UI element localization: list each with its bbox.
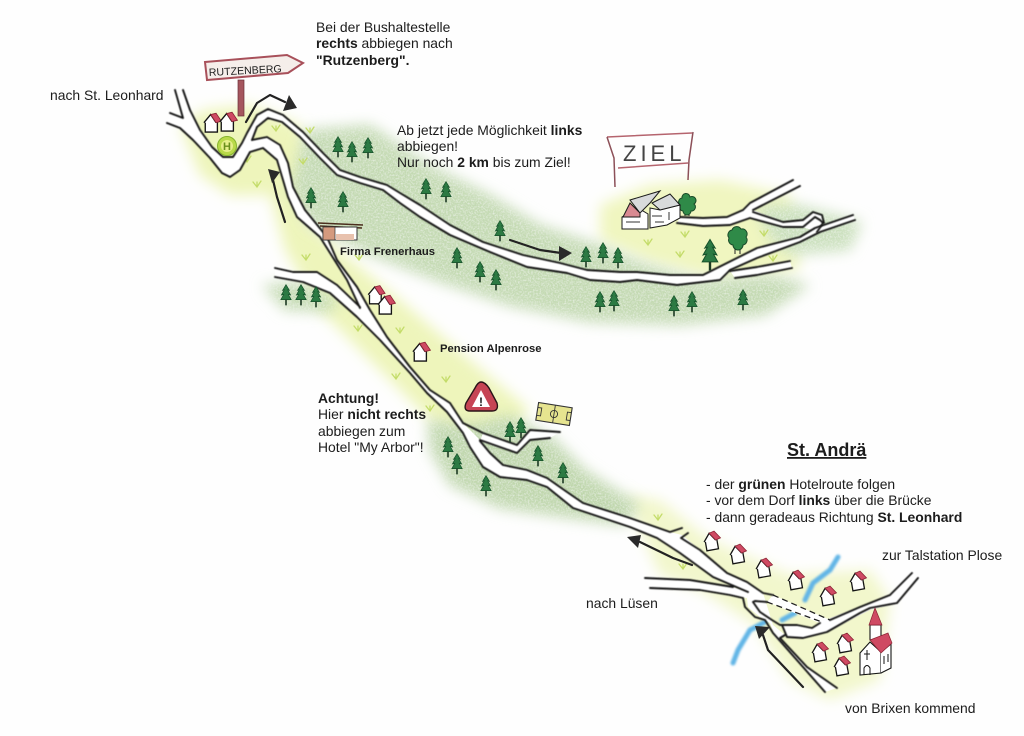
arrow: up the main road xyxy=(268,169,285,222)
icon: houses by the junction xyxy=(368,286,395,314)
label: Firma Frenerhaus: Firma Frenerhaus xyxy=(340,246,435,258)
text: turn left instruction: abbiegen! xyxy=(397,138,458,154)
icon: Rutzenberg direction sign: RUTZENBERG xyxy=(209,63,282,79)
label: von Brixen kommend: von Brixen kommend xyxy=(845,700,975,716)
label: nach Lüsen: nach Lüsen xyxy=(586,595,658,611)
tree: round trees at goal xyxy=(679,193,747,254)
heading: St. Andrä: St. Andrä xyxy=(787,440,867,460)
icon: goal sign ZIEL xyxy=(607,132,693,187)
landscape: yellow-green meadows xyxy=(180,105,890,700)
river xyxy=(733,557,838,663)
text: bus stop instruction: Bei der Bushaltestelle xyxy=(316,19,450,35)
icon: Rutzenberg direction sign xyxy=(205,55,303,116)
trees: forest upper valley xyxy=(306,137,748,316)
icon: village houses xyxy=(703,530,868,676)
icon: goal hotel building xyxy=(622,191,680,229)
road: valley road edges xyxy=(167,90,918,692)
arrow: along the upper road xyxy=(510,240,572,261)
trees: lower forest xyxy=(281,285,568,496)
text: warning note: abbiegen zum xyxy=(318,423,405,439)
landscape: forest green areas xyxy=(262,125,862,525)
icon: bus stop H: H xyxy=(223,141,231,153)
icon: bus stop H xyxy=(218,136,236,156)
icon: football field xyxy=(536,402,572,426)
icon: church xyxy=(860,608,892,675)
text: St. Andrä directions: - vor dem Dorf links über die Brücke xyxy=(706,492,931,508)
text: St. Andrä directions: - der grünen Hotelroute folgen xyxy=(706,476,895,492)
text: warning note: Achtung! xyxy=(318,390,379,406)
arrow: to Lüsen xyxy=(627,535,692,565)
tree: large fir at goal xyxy=(702,239,718,271)
icon: goal sign ZIEL: ZIEL xyxy=(623,141,685,166)
label: nach St. Leonhard: nach St. Leonhard xyxy=(50,87,164,103)
icon: warning triangle: ! xyxy=(479,395,483,409)
bridge dashed lines xyxy=(767,595,830,622)
text: St. Andrä directions: - dann geradeaus Richtung St. Leonhard xyxy=(706,509,962,525)
road white fills xyxy=(167,90,918,692)
icon: Pension Alpenrose house xyxy=(413,342,430,361)
text: turn left instruction: Nur noch 2 km bis zum Ziel! xyxy=(397,154,571,170)
road: goal branches xyxy=(677,180,824,278)
text: bus stop instruction: "Rutzenberg". xyxy=(316,52,409,68)
text: warning note: Hier nicht rechts xyxy=(318,406,426,422)
icon: houses at bus stop xyxy=(204,112,237,132)
label: zur Talstation Plose: zur Talstation Plose xyxy=(882,547,1002,563)
text: warning note: Hotel "My Arbor"! xyxy=(318,439,424,455)
icon: warning triangle xyxy=(465,382,497,411)
text: turn left instruction: Ab jetzt jede Möglichkeit links xyxy=(397,122,582,138)
grass tufts xyxy=(243,125,777,569)
icon: Firma Frenerhaus shed xyxy=(318,223,363,240)
arrow: turn right to Rutzenberg xyxy=(246,95,297,122)
text: bus stop instruction: rechts abbiegen nach xyxy=(316,35,453,51)
label: Pension Alpenrose: Pension Alpenrose xyxy=(440,343,541,355)
arrow: from Brixen xyxy=(755,626,803,687)
